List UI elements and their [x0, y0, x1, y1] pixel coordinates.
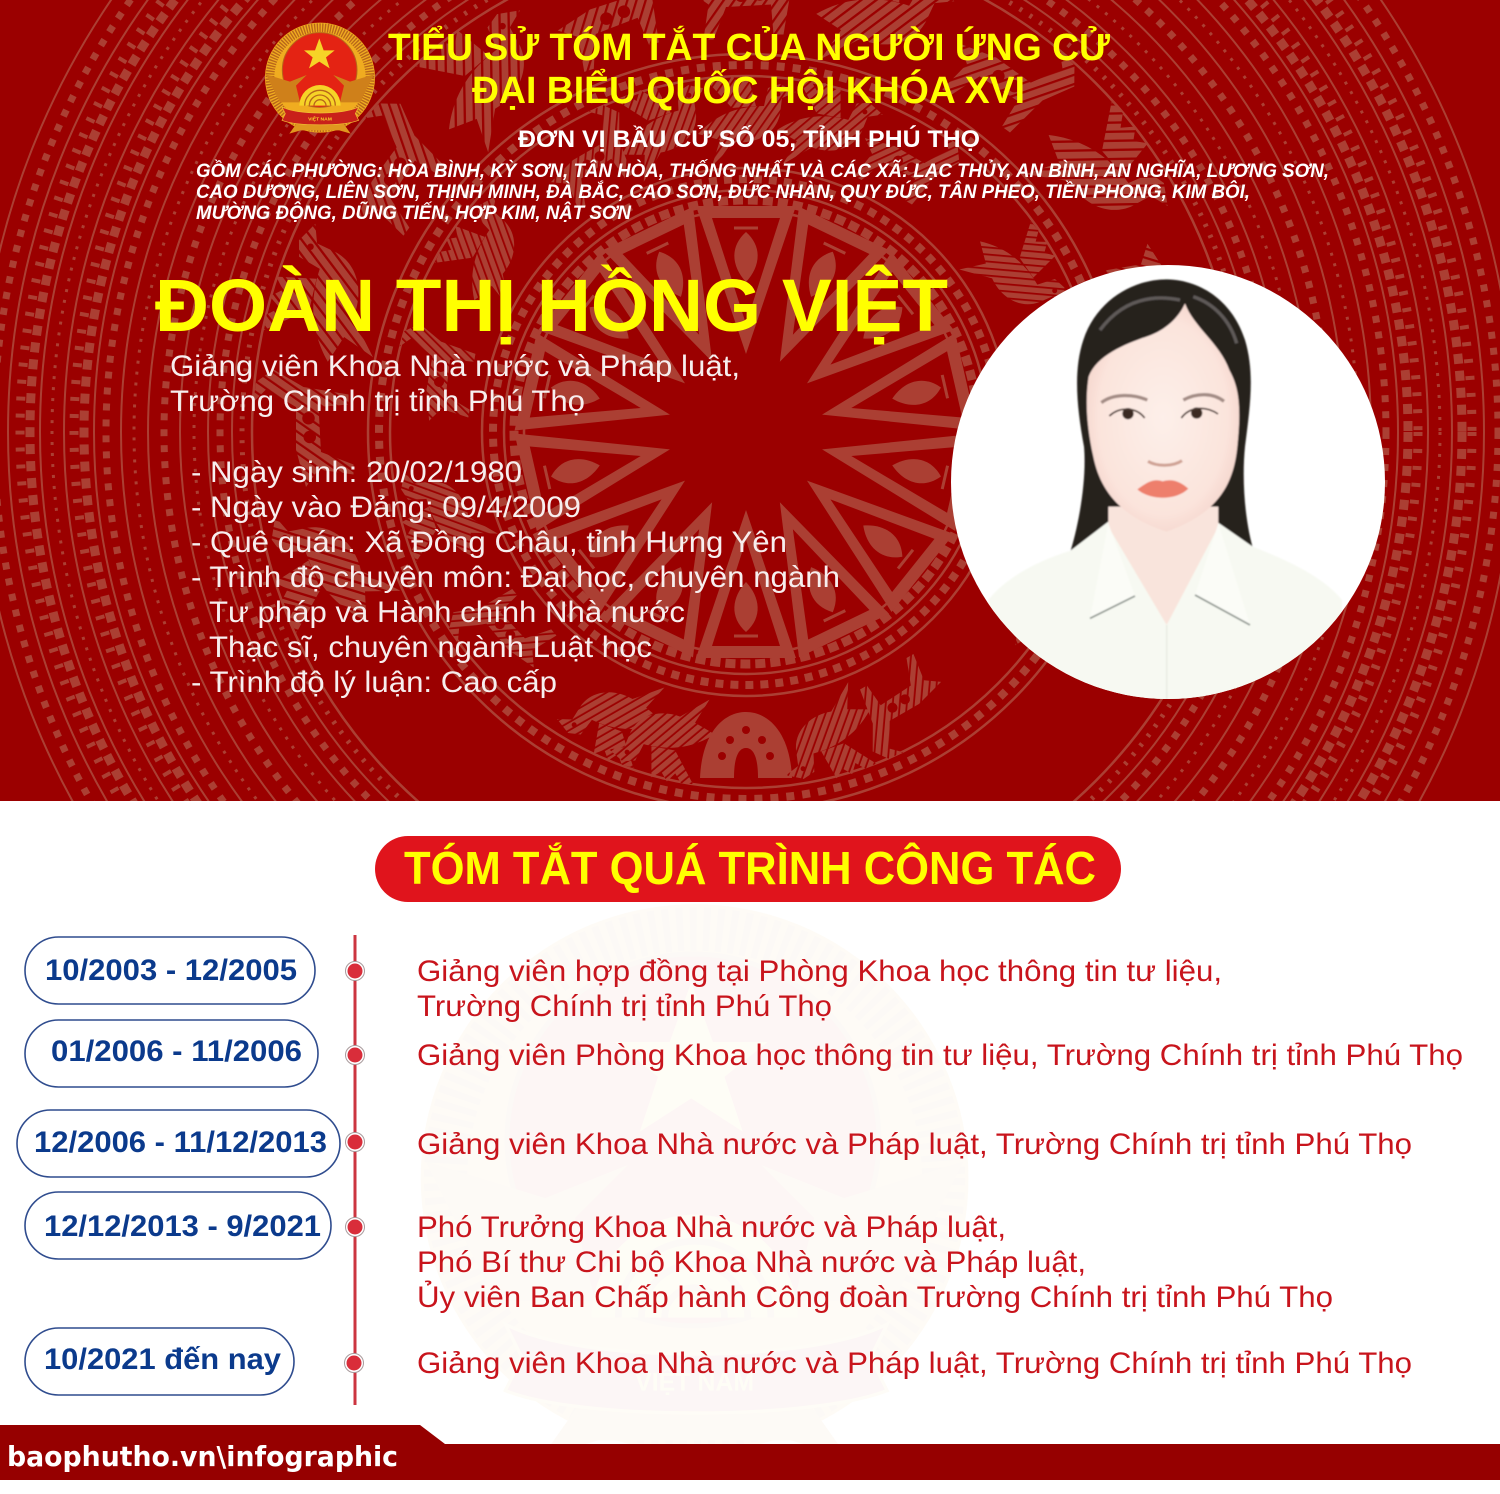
- date pill: 01/2006 - 11/2006: 01/2006 - 11/2006: [51, 1035, 302, 1068]
- candidate name: ĐOÀN THỊ HỒNG VIỆT: [155, 264, 948, 347]
- career entry 5: Giảng viên Khoa Nhà nước và Pháp luật, Trường Chính trị tỉnh Phú Thọ: [417, 1347, 1412, 1380]
- timeline axis: [344, 935, 364, 1405]
- career entry 4: Phó Bí thư Chi bộ Khoa Nhà nước và Pháp luật,: [417, 1246, 1086, 1279]
- footer bar: baophutho.vn\infographic: [7, 1440, 398, 1473]
- career entry 2: Giảng viên Phòng Khoa học thông tin tư liệu, Trường Chính trị tỉnh Phú Thọ: [417, 1039, 1463, 1072]
- career entry 4: Ủy viên Ban Chấp hành Công đoàn Trường Chính trị tỉnh Phú Thọ: [417, 1280, 1333, 1314]
- candidate details: - Trình độ chuyên môn: Đại học, chuyên ngành: [191, 561, 840, 594]
- constituency wards list: GỒM CÁC PHƯỜNG: HÒA BÌNH, KỲ SƠN, TÂN HÒA, THỐNG NHẤT VÀ CÁC XÃ: LẠC THỦY, AN BÌNH, AN NGHĨA, LƯƠNG SƠN,: [196, 160, 1329, 182]
- career entry 4: [417, 1211, 1333, 1314]
- footer bar: [0, 1425, 1500, 1480]
- candidate details: - Quê quán: Xã Đồng Châu, tỉnh Hưng Yên: [191, 526, 787, 559]
- candidate details: - Ngày sinh: 20/02/1980: [191, 456, 522, 489]
- career entry 1: Giảng viên hợp đồng tại Phòng Khoa học thông tin tư liệu,: [417, 955, 1222, 988]
- constituency wards list: [196, 160, 1329, 224]
- career entry 4: Phó Trưởng Khoa Nhà nước và Pháp luật,: [417, 1211, 1006, 1244]
- date pill: 10/2003 - 12/2005: 10/2003 - 12/2005: [45, 954, 297, 987]
- candidate details: [191, 456, 840, 699]
- constituency wards list: MƯỜNG ĐỘNG, DŨNG TIẾN, HỢP KIM, NẬT SƠN: [196, 202, 632, 224]
- portrait photo: [951, 265, 1385, 727]
- candidate position: Trường Chính trị tỉnh Phú Thọ: [170, 385, 585, 418]
- candidate details: Tư pháp và Hành chính Nhà nước: [209, 596, 685, 629]
- constituency heading: ĐƠN VỊ BẦU CỬ SỐ 05, TỈNH PHÚ THỌ: [518, 124, 980, 153]
- icon: national emblem: [265, 23, 375, 134]
- date pill: 12/2006 - 11/12/2013: 12/2006 - 11/12/2013: [34, 1126, 327, 1159]
- career entry 1: [417, 955, 1222, 1023]
- date pill: 10/2003 - 12/2005: [25, 937, 315, 1004]
- title: [388, 24, 1110, 112]
- title: TIỂU SỬ TÓM TẮT CỦA NGƯỜI ỨNG CỬ: [388, 24, 1110, 69]
- date pill: 12/2006 - 11/12/2013: [17, 1110, 340, 1177]
- candidate position: Giảng viên Khoa Nhà nước và Pháp luật,: [170, 350, 740, 383]
- candidate details: Thạc sĩ, chuyên ngành Luật học: [209, 631, 652, 664]
- candidate details: - Ngày vào Đảng: 09/4/2009: [191, 491, 581, 524]
- career entry 3: Giảng viên Khoa Nhà nước và Pháp luật, Trường Chính trị tỉnh Phú Thọ: [417, 1128, 1412, 1161]
- constituency wards list: CAO DƯƠNG, LIÊN SƠN, THỊNH MINH, ĐÀ BẮC, CAO SƠN, ĐỨC NHÀN, QUY ĐỨC, TÂN PHEO, TIỀN PHONG, KIM BÔI,: [196, 181, 1250, 203]
- date pill: 10/2021 đến nay: [25, 1328, 294, 1395]
- banner panel with bronze drum pattern: [0, 0, 1500, 801]
- date pill: 12/12/2013 - 9/2021: 12/12/2013 - 9/2021: [44, 1210, 321, 1243]
- candidate details: - Trình độ lý luận: Cao cấp: [191, 666, 557, 699]
- title: ĐẠI BIỂU QUỐC HỘI KHÓA XVI: [472, 67, 1025, 112]
- section heading pill: TÓM TẮT QUÁ TRÌNH CÔNG TÁC: [404, 842, 1096, 894]
- watermark emblem: [421, 904, 969, 1457]
- career entry 1: Trường Chính trị tỉnh Phú Thọ: [417, 990, 832, 1023]
- date pill: 01/2006 - 11/2006: [25, 1020, 318, 1087]
- date pill: 10/2021 đến nay: 10/2021 đến nay: [44, 1343, 281, 1376]
- candidate position: [170, 350, 740, 418]
- date pill: 12/12/2013 - 9/2021: [25, 1192, 331, 1259]
